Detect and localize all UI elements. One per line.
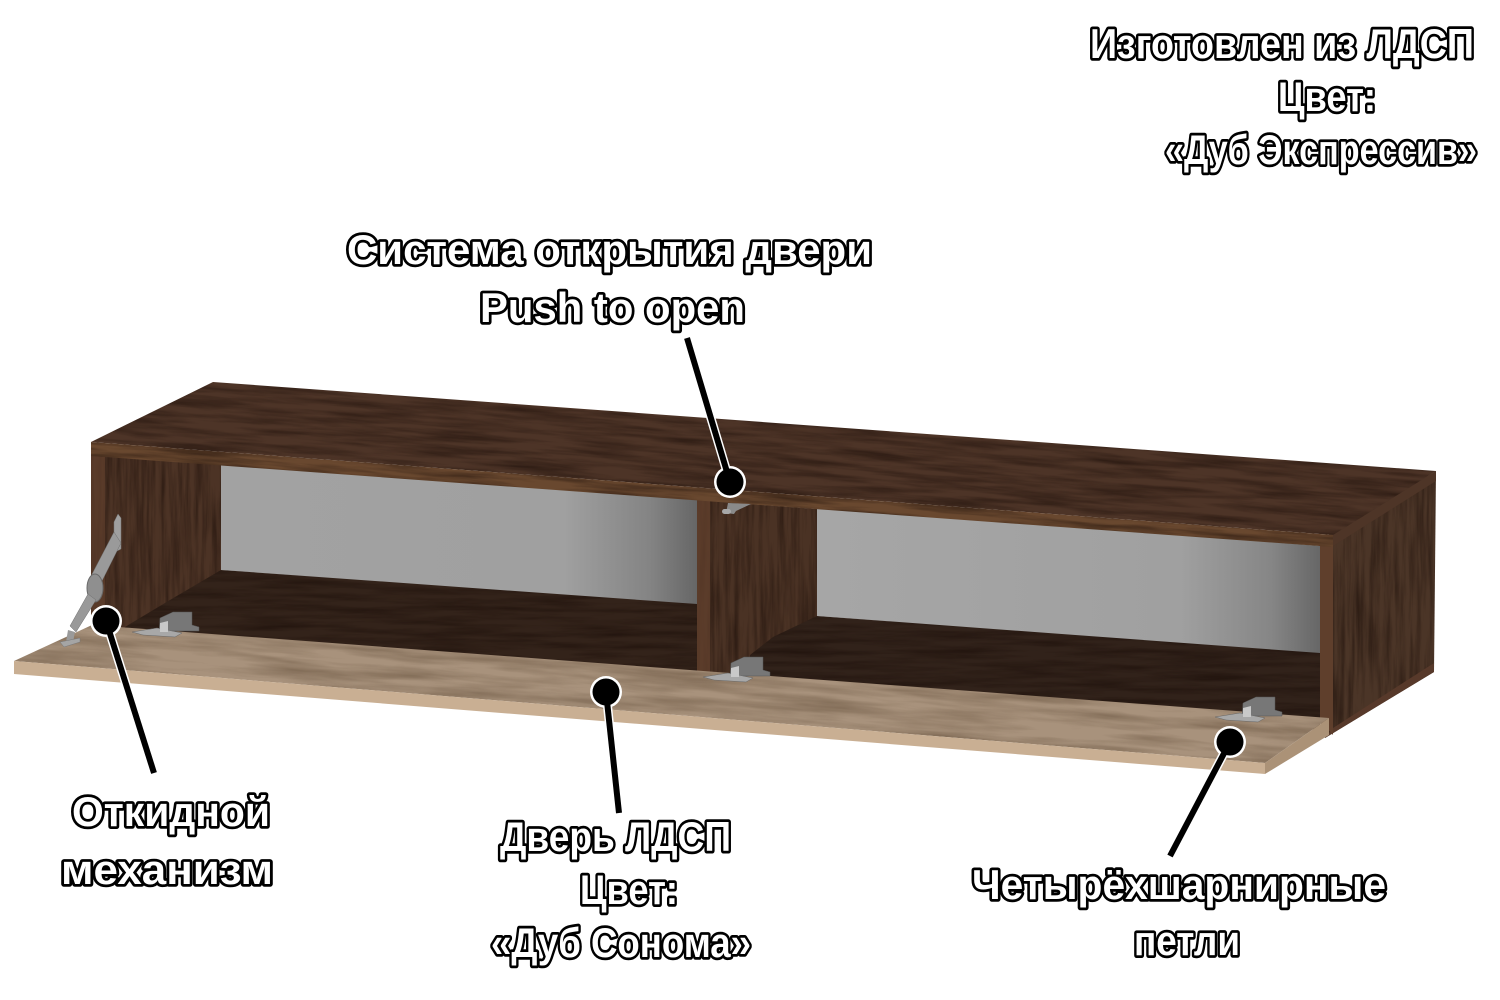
divider panel [697, 500, 817, 673]
divider front edge [697, 500, 710, 680]
icon: push to open latch [722, 503, 751, 514]
right side bottom edge [1325, 663, 1434, 738]
icon: hinge middle [703, 657, 770, 682]
text block: flap mechanism [61, 788, 273, 893]
text block: body material: Цвет: [1278, 73, 1376, 120]
arrow: door pointer [590, 676, 622, 813]
arrow: push to open pointer [687, 338, 746, 498]
icon: flap stay mechanism [60, 514, 121, 647]
text block: door material: Дверь ЛДСП [500, 813, 731, 860]
text block: hinges [972, 861, 1386, 964]
text block: hinges: петли [1134, 917, 1240, 964]
panel: open door [14, 626, 1329, 774]
arrow: flap mechanism pointer [90, 605, 154, 773]
text block: hinges: Четырёхшарнирные [972, 861, 1386, 908]
back panel: right compartment [817, 507, 1321, 655]
text block: door material [491, 813, 751, 966]
right side top edge [1333, 471, 1436, 546]
text block: door opening system: Система открытия двери [347, 226, 872, 273]
text block: flap mechanism: механизм [61, 846, 273, 893]
side panel: right [1321, 471, 1436, 738]
left front edge [91, 456, 105, 640]
side panel: left [91, 456, 221, 628]
text block: door opening system [347, 226, 872, 331]
shelf: left floor [125, 570, 697, 670]
top front edge [91, 442, 1333, 547]
text block: flap mechanism: Откидной [72, 788, 270, 835]
icon: hinge right [1215, 697, 1282, 722]
text block: door opening system: Push to open [480, 284, 745, 331]
door right edge [1265, 718, 1329, 774]
text block: door material: Цвет: [580, 866, 678, 913]
icon: hinge left [132, 612, 199, 637]
back panel: left compartment [221, 462, 697, 606]
shelf: right floor [750, 616, 1320, 730]
top face [91, 382, 1436, 535]
panel: cabinet carcass [91, 382, 1436, 738]
door top surface [14, 626, 1329, 763]
text block: body material [1090, 20, 1477, 173]
text block: door material: «Дуб Сонома» [491, 919, 751, 966]
right front edge [1320, 546, 1333, 735]
arrow: hinge pointer [1170, 726, 1246, 856]
door front edge [14, 661, 1265, 774]
